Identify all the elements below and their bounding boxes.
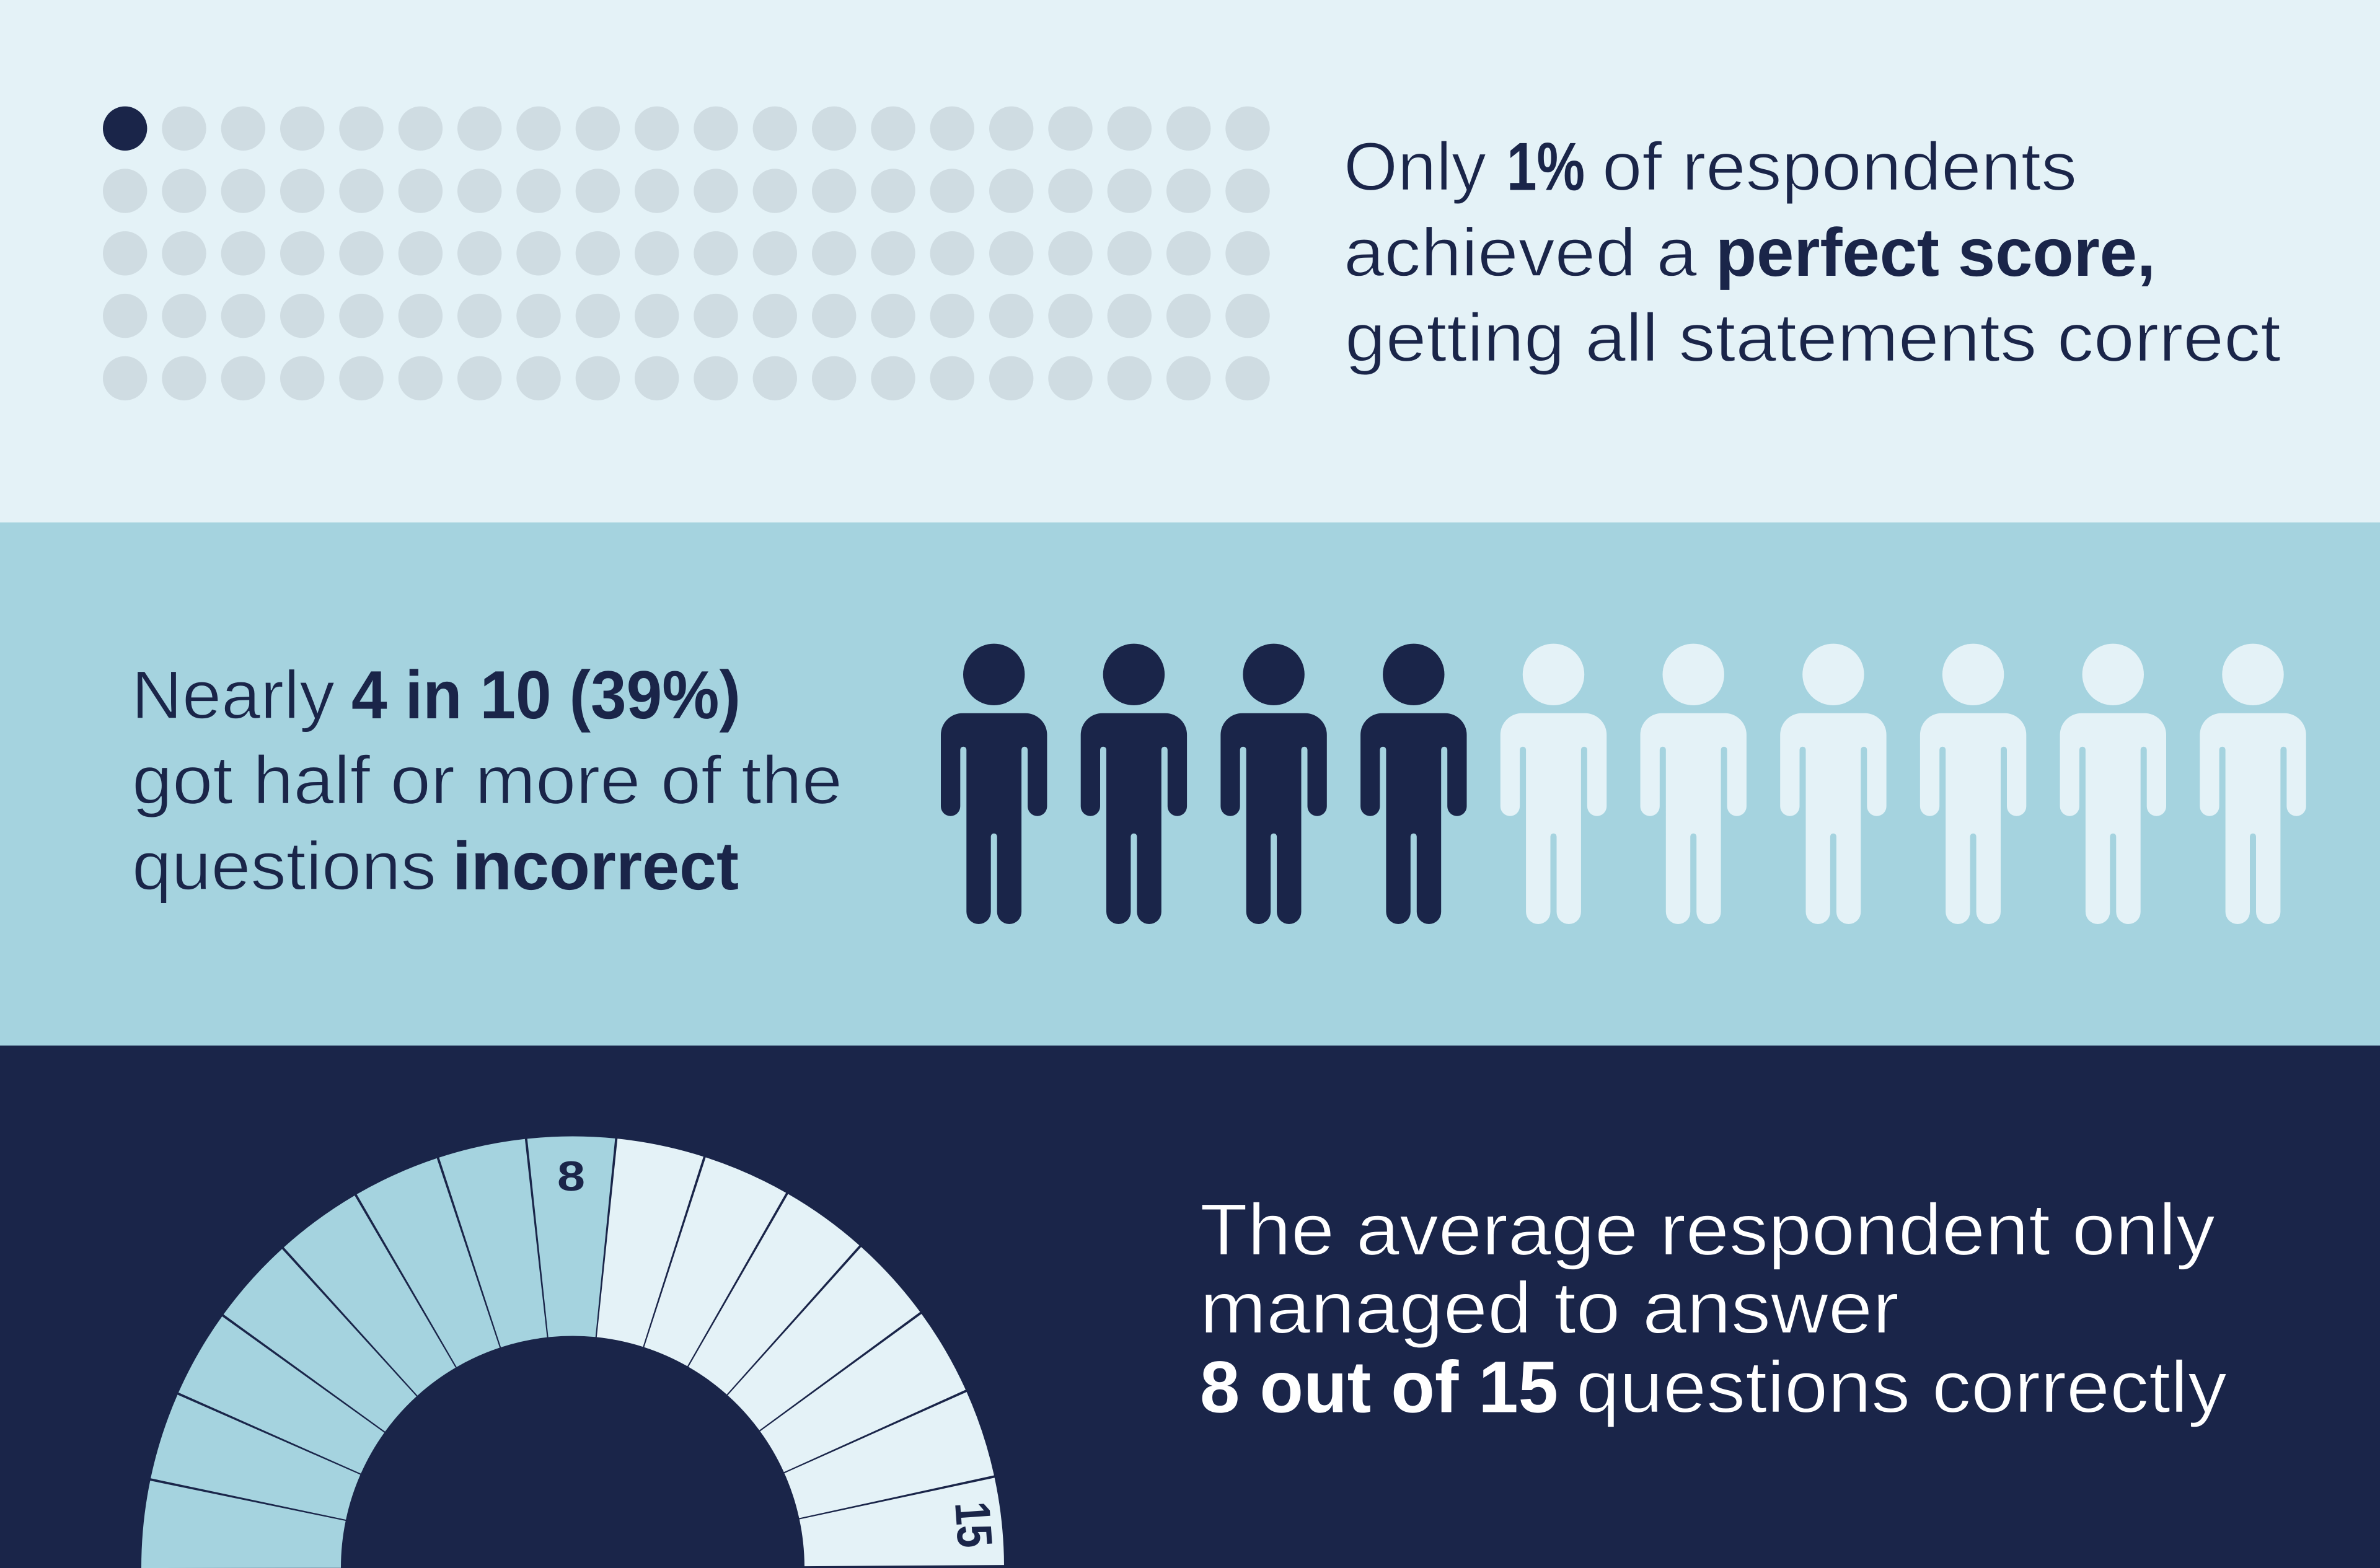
person 8 light — [1920, 644, 2026, 924]
gauge segments remaining (9 to 15) — [577, 1137, 1007, 1568]
text: nearly 4 in 10 got half or more incorrect: questions — [132, 828, 436, 904]
person 6 light — [1640, 644, 1747, 924]
text: average respondent managed 8 out of 15: managed to answer — [1200, 1267, 1899, 1349]
text: nearly 4 in 10 got half or more incorrect: Nearly — [131, 657, 335, 733]
person 4 dark — [1360, 644, 1466, 924]
text: average respondent managed 8 out of 15: 8 out of 15 — [1200, 1346, 1558, 1428]
gauge label 8: 8 — [557, 1153, 585, 1200]
person 5 light — [1501, 644, 1606, 924]
panel: average score — [0, 1046, 2380, 1568]
gauge: 8 of 15 segments — [139, 1136, 1007, 1568]
person 7 light — [1780, 644, 1887, 924]
text: only 1% achieved a perfect score — [1344, 129, 2281, 376]
text: average respondent managed 8 out of 15: The average respondent only — [1200, 1189, 2215, 1271]
text: only 1% achieved a perfect score: getting all statements correct — [1345, 300, 2281, 376]
pictogram: 4 of 10 people highlighted — [941, 644, 2306, 924]
panel: perfect score — [0, 0, 2380, 522]
gauge segments answered correctly (1 to 8) — [139, 1136, 616, 1568]
gauge label 15: 15 — [945, 1500, 1003, 1549]
person 10 light — [2200, 644, 2306, 924]
text: average respondent managed 8 out of 15: questions correctly — [1576, 1346, 2227, 1428]
text: only 1% achieved a perfect score: of respondents — [1602, 129, 2077, 205]
person 9 light — [2060, 644, 2166, 924]
text: average respondent managed 8 out of 15 — [1200, 1189, 2227, 1428]
text: nearly 4 in 10 got half or more incorrect — [131, 657, 842, 904]
text: only 1% achieved a perfect score: 1% — [1507, 129, 1585, 205]
text: nearly 4 in 10 got half or more incorrect: 4 in 10 (39%) — [351, 657, 741, 733]
text: nearly 4 in 10 got half or more incorrect: got half or more of the — [132, 742, 842, 819]
text: only 1% achieved a perfect score: achieved a — [1344, 214, 1698, 291]
person 2 dark — [1081, 644, 1187, 924]
dot grid: 1 of 100 highlighted — [103, 107, 1270, 400]
person 3 dark — [1220, 644, 1327, 924]
panel: half or more incorrect — [0, 522, 2380, 1046]
person 1 dark — [941, 644, 1047, 924]
text: only 1% achieved a perfect score: Only — [1344, 129, 1486, 205]
text: only 1% achieved a perfect score: perfect score, — [1716, 214, 2156, 291]
text: nearly 4 in 10 got half or more incorrect: incorrect — [452, 828, 739, 904]
